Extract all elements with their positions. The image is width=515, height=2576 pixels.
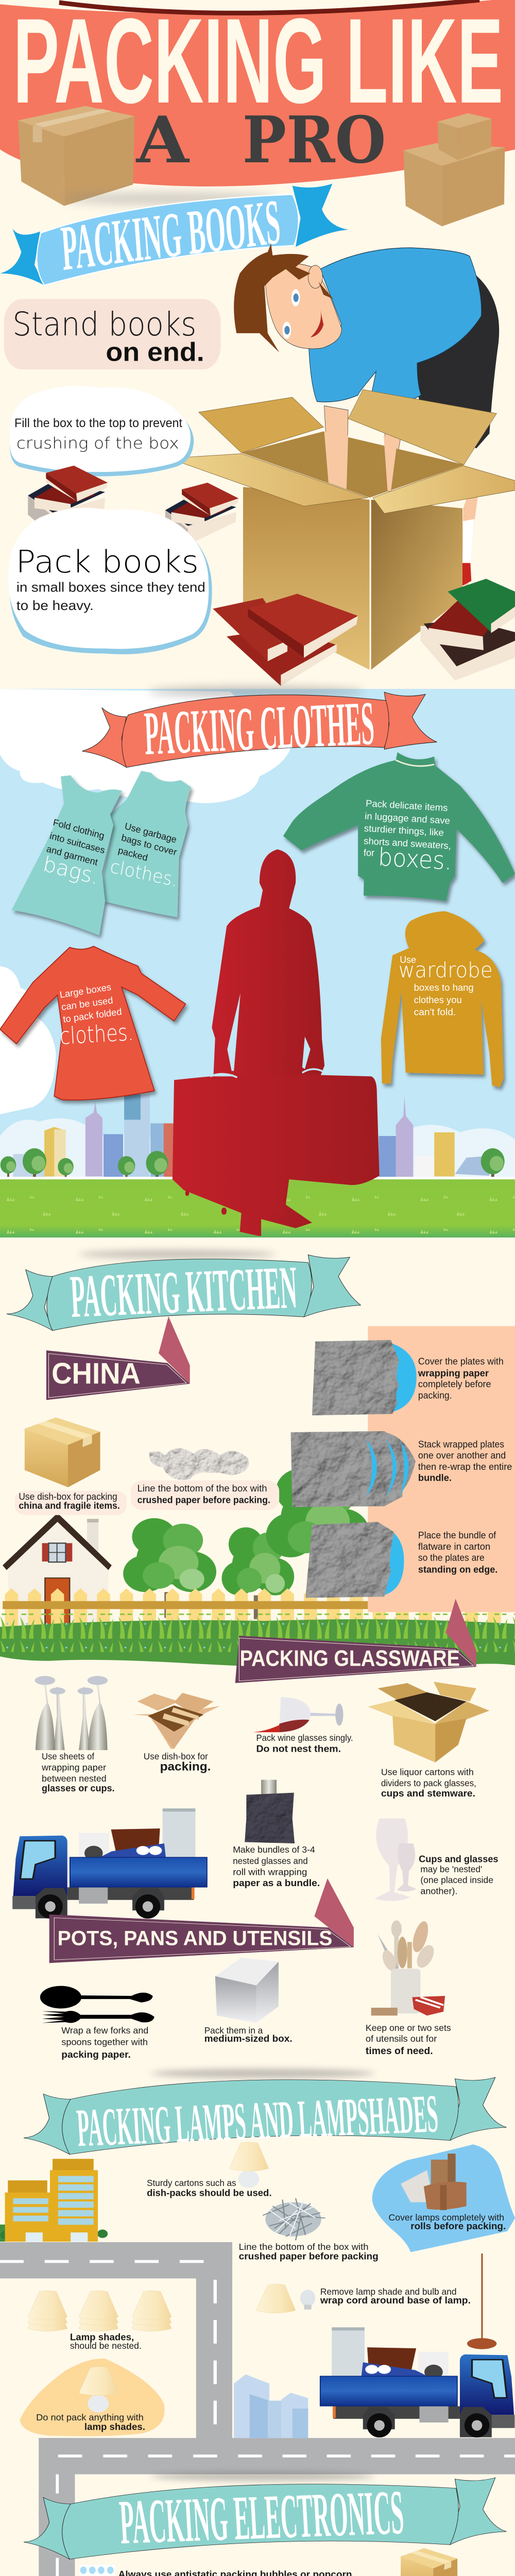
plate text 3: so the plates are xyxy=(418,1553,485,1563)
clothing: teal dress right xyxy=(104,771,191,918)
text: medium box xyxy=(204,2026,293,2044)
plate text 1 xyxy=(418,1356,504,1401)
fence beyond panel base xyxy=(373,1612,501,1633)
clothing: orange dress: clothes. xyxy=(59,1019,134,1050)
clothing: green sweater: shorts and sweaters, xyxy=(364,835,451,851)
section: packing clothes xyxy=(0,686,515,1236)
icon: dish box xyxy=(25,1417,100,1487)
road markings lower xyxy=(56,2558,500,2576)
clothing: yellow hoodie: Use xyxy=(400,954,416,965)
text: liquor carton: dividers to pack glasses, xyxy=(381,1778,476,1788)
clothing: teal dress left: bags. xyxy=(41,852,101,890)
text: nested glasses: wrapping paper xyxy=(41,1763,106,1773)
text: bundles: paper as a bundle. xyxy=(233,1878,320,1889)
text: utensils xyxy=(366,2023,451,2057)
text: lamp shades nested: Lamp shades, xyxy=(70,2332,134,2343)
text: remove shade: wrap cord around base of lamp. xyxy=(320,2295,471,2306)
text: forks xyxy=(61,2026,148,2060)
illustration: open cardboard box xyxy=(169,389,515,670)
blob callout: do not pack: Do not pack anything with xyxy=(36,2413,144,2422)
road network upper xyxy=(0,2242,515,2517)
blob callout: do not pack xyxy=(20,2359,165,2436)
road network lower xyxy=(39,2494,515,2576)
trees xyxy=(123,1469,370,1619)
cloud callout: pack books: to be heavy. xyxy=(16,598,94,613)
illustration: nested wine glasses xyxy=(374,1819,417,1901)
plate text 3: Place the bundle of xyxy=(418,1530,496,1541)
text: nested glasses: Use sheets of xyxy=(42,1752,95,1761)
text: nested glasses: glasses or cups. xyxy=(42,1783,115,1793)
house xyxy=(3,1513,112,1627)
banner: pots pans utensils xyxy=(49,1878,354,1963)
clothing: green sweater: in luggage and save xyxy=(365,810,450,826)
plate text 1: Cover the plates with xyxy=(418,1356,504,1367)
text: utensils: times of need. xyxy=(366,2045,433,2057)
cloud: left middle xyxy=(0,966,56,1114)
blob callout: do not pack: lamp shades. xyxy=(84,2421,145,2432)
text: medium box: medium-sized box. xyxy=(204,2033,293,2044)
clothing: teal dress right: packed xyxy=(117,844,149,863)
clothing: green sweater: for xyxy=(364,848,374,858)
clothing: teal dress left: into suitcases xyxy=(49,830,106,856)
city left xyxy=(1,1094,174,1183)
ribbon: packing books xyxy=(0,184,349,285)
icon: sturdy box xyxy=(401,2548,457,2576)
text: forks: spoons together with xyxy=(61,2037,148,2047)
illustration: man packing xyxy=(234,244,499,586)
plate text 3: flatware in carton xyxy=(418,1541,490,1552)
clothing: yellow hoodie: can't fold. xyxy=(414,1007,456,1018)
ribbon: packing electronics xyxy=(24,2471,506,2559)
text panel: stand books: Stand books xyxy=(12,306,196,344)
section: packing electronics xyxy=(7,2471,515,2576)
sky background xyxy=(0,689,515,1182)
icon: shade and bulb xyxy=(256,2284,315,2313)
banner top arc xyxy=(59,0,479,13)
icon: bubble wrap xyxy=(80,2565,115,2576)
cloud callout: fill the box xyxy=(10,386,194,476)
text: nested glasses xyxy=(41,1752,115,1793)
cloud callout: pack books: Pack books xyxy=(16,544,199,580)
plate text 2 xyxy=(418,1439,512,1483)
text: dish box xyxy=(144,1752,211,1773)
ribbon: packing clothes xyxy=(82,686,437,768)
icon: book stack 1 xyxy=(28,466,108,534)
icon: large red books xyxy=(213,594,358,686)
text: dish box: packing. xyxy=(160,1760,211,1773)
plate 3 wrapped xyxy=(305,1522,404,1598)
section: lamps and lampshades xyxy=(0,2069,515,2517)
grass xyxy=(0,1177,515,1236)
plate 1 wrapped xyxy=(312,1340,417,1415)
clothing: teal dress right: bags to cover xyxy=(121,832,178,858)
text: liquor carton: cups and stemware. xyxy=(381,1788,475,1799)
icon: spoon and fork xyxy=(40,1986,154,2023)
icon: floor lamp stand xyxy=(467,2253,496,2349)
text: crushed paper line: Line the bottom of the box with xyxy=(239,2242,369,2252)
callout: crushed paper: Line the bottom of the box with xyxy=(138,1483,267,1494)
clothing: green sweater: sturdier things, like xyxy=(364,823,444,838)
clothing: orange dress xyxy=(0,946,185,1100)
plate text 1: wrapping paper xyxy=(418,1368,489,1379)
icon: medium box xyxy=(215,1958,279,2023)
text: medium box: Pack them in a xyxy=(204,2026,263,2036)
illustration: utensil jar xyxy=(371,1920,445,2015)
illustration: nested glasses xyxy=(35,1676,108,1750)
clothing: teal dress left xyxy=(11,775,122,936)
text: crushed paper line xyxy=(239,2242,379,2262)
banner: china: CHINA xyxy=(52,1357,141,1390)
plate text 1: completely before xyxy=(418,1379,491,1389)
clothing: teal dress right: clothes. xyxy=(109,856,179,891)
text: dish box: Use dish-box for xyxy=(144,1752,208,1761)
illustration: blue buildings xyxy=(234,2375,308,2438)
plate stack wrapped xyxy=(290,1431,416,1507)
icon: book stack 2 xyxy=(165,483,238,546)
icon: nested shades xyxy=(28,2291,171,2331)
cloud: horizon right xyxy=(388,1125,515,1179)
icon: shredded paper xyxy=(263,2198,325,2240)
section divider strip xyxy=(0,1236,515,1238)
text: utensils: of utensils out for xyxy=(366,2034,437,2044)
clothing: teal dress right: Use garbage xyxy=(124,820,178,845)
callout: dish box: china and fragile items. xyxy=(19,1501,120,1511)
icon: stacked boxes right xyxy=(403,113,505,226)
illustration: moving truck xyxy=(12,1808,207,1919)
text: crushed paper line: crushed paper before packing xyxy=(239,2251,379,2262)
clothing: yellow hoodie: boxes to hang xyxy=(414,982,474,993)
text: bundles: Make bundles of 3-4 xyxy=(233,1845,315,1855)
banner: china xyxy=(46,1316,190,1400)
illustration: moving truck mirrored xyxy=(320,2327,514,2437)
text: cups and glasses: (one placed inside xyxy=(420,1875,493,1886)
fence xyxy=(3,1588,368,1633)
text: cups and glasses: another). xyxy=(420,1887,457,1896)
grass strip xyxy=(0,1614,515,1668)
clothing: orange dress: Large boxes xyxy=(59,981,112,1000)
blob callout: cover lamps xyxy=(372,2144,515,2252)
text: cups and glasses xyxy=(419,1854,499,1896)
clothing: teal dress left: and garment xyxy=(45,843,99,868)
clothing: yellow hoodie: wardrobe xyxy=(399,958,493,982)
callout: crushed paper: crushed paper before packing. xyxy=(138,1495,270,1505)
text: liquor carton: Use liquor cartons with xyxy=(381,1767,474,1777)
callout: crushed paper xyxy=(131,1481,279,1510)
clothing: yellow hoodie xyxy=(381,911,504,1087)
text: nested glasses: between nested xyxy=(42,1774,107,1784)
text: forks: Wrap a few forks and xyxy=(61,2026,148,2036)
text: utensils: Keep one or two sets xyxy=(366,2023,451,2033)
banner: packing glassware xyxy=(235,1599,476,1683)
title line 2 xyxy=(136,103,386,178)
illustration: spilled wine glass xyxy=(253,1697,344,1732)
icon: lamp xyxy=(229,2142,269,2188)
text panel: stand books xyxy=(4,299,221,369)
text: sturdy cartons: Sturdy cartons such as xyxy=(147,2178,236,2188)
banner: packing glassware: PACKING GLASSWARE xyxy=(240,1646,460,1671)
city right xyxy=(379,1096,505,1183)
text: bundles xyxy=(233,1845,320,1889)
callout: dish box xyxy=(15,1491,127,1515)
cloud callout: pack books xyxy=(8,508,212,654)
illustration: wrapped glass bundle xyxy=(245,1780,295,1843)
cloud: top left xyxy=(0,689,290,803)
section: packing kitchen xyxy=(0,1250,515,1683)
banner: pots pans utensils: POTS, PANS AND UTENSILS xyxy=(58,1926,332,1950)
text: liquor carton xyxy=(381,1767,476,1799)
clothing: green sweater: boxes. xyxy=(377,843,453,875)
ribbon: packing kitchen xyxy=(7,1250,360,1331)
title banner xyxy=(0,0,515,187)
text: lamp shades nested xyxy=(70,2332,142,2351)
clothing: yellow hoodie: clothes you xyxy=(414,994,462,1005)
text: sturdy cartons xyxy=(147,2178,271,2198)
cloud: horizon left xyxy=(0,1118,177,1179)
plate text 1: packing. xyxy=(418,1390,452,1401)
text: sturdy cartons: dish-packs should be used. xyxy=(147,2188,271,2198)
clothing: teal dress left: Fold clothing xyxy=(52,817,106,841)
icon: right book pile xyxy=(420,579,515,681)
callout: dish box: Use dish-box for packing xyxy=(19,1492,117,1502)
text: bundles: roll with wrapping xyxy=(233,1867,307,1877)
cloud callout: pack books: in small boxes since they tend xyxy=(16,580,205,595)
text: remove shade: Remove lamp shade and bulb and xyxy=(320,2287,457,2297)
title line 2: PRO xyxy=(243,103,386,178)
plate text 3 xyxy=(418,1530,497,1575)
plate text 3: standing on edge. xyxy=(418,1565,497,1575)
text panel: stand books: on end. xyxy=(106,337,204,367)
text: forks: packing paper. xyxy=(61,2049,131,2060)
cloud callout: fill the box: crushing of the box xyxy=(16,435,179,452)
text: bundles: nested glasses and xyxy=(233,1856,308,1866)
illustration: open dish box xyxy=(133,1693,220,1749)
illustration: liquor carton xyxy=(368,1682,489,1762)
clothing: green sweater: Pack delicate items xyxy=(366,798,448,814)
plate text 2: bundle. xyxy=(418,1473,452,1483)
ribbon: packing books: PACKING BOOKS xyxy=(59,185,283,284)
illustration: yellow buildings xyxy=(0,2159,108,2242)
text: wine glasses: Do not nest them. xyxy=(256,1743,341,1754)
text: wine glasses: Pack wine glasses singly. xyxy=(256,1733,353,1743)
icon: crushed paper balls xyxy=(149,1448,249,1480)
icon: cardboard box left xyxy=(18,106,134,206)
text: wine glasses xyxy=(256,1733,353,1754)
title line 2: A xyxy=(136,103,190,178)
text: cups and glasses: may be 'nested' xyxy=(420,1865,482,1875)
clothing: orange dress: can be used xyxy=(61,995,113,1012)
section: packing books xyxy=(0,0,515,686)
peach panel: plates xyxy=(368,1326,515,1612)
road markings upper xyxy=(0,2260,515,2498)
text: lamp shades nested: should be nested. xyxy=(70,2341,142,2351)
cloud callout: fill the box: Fill the box to the top to prevent xyxy=(14,416,182,430)
clothing: green sweater xyxy=(283,752,515,901)
text: remove shade xyxy=(320,2287,471,2306)
section: glassware and utensils xyxy=(12,1676,499,2060)
clothing: orange dress: to pack folded xyxy=(62,1006,123,1025)
silhouette: traveller with suitcase xyxy=(173,850,380,1236)
